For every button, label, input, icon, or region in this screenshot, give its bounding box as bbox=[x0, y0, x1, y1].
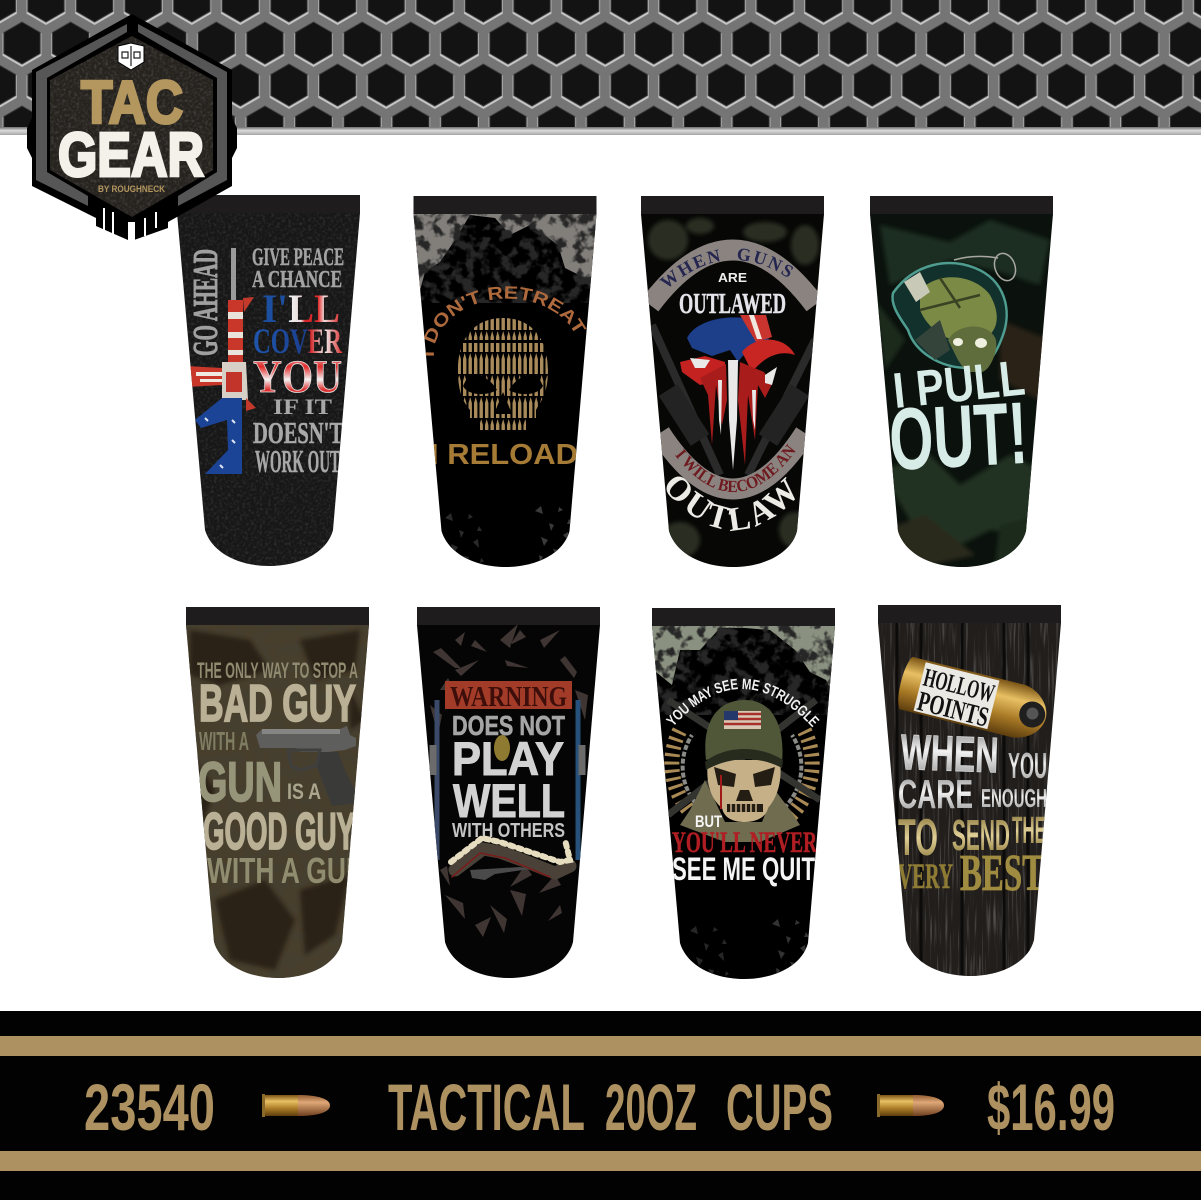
cup 2: i don't retreat bbox=[414, 214, 596, 567]
with a gun text: WITH A GUN bbox=[207, 850, 365, 891]
cup 8: hollow points bbox=[878, 605, 1062, 977]
bad guy text: BAD GUY bbox=[199, 675, 356, 733]
you text: YOU bbox=[253, 351, 342, 403]
cup 8: hollow points: YOU bbox=[1008, 745, 1047, 786]
hollow text: HOLLOW bbox=[921, 663, 998, 708]
cup 1: give peace a chance: WORK OUT bbox=[255, 443, 340, 479]
camo blobs bbox=[875, 220, 1050, 570]
play text: PLAY bbox=[452, 732, 564, 785]
arc text: I DON'T RETREAT bbox=[424, 286, 586, 356]
handgun bbox=[256, 726, 358, 806]
skull eye wings bbox=[742, 340, 795, 368]
logo panel texture bbox=[50, 36, 213, 217]
if it text: IF IT bbox=[273, 394, 332, 419]
good guy text: GOOD GUY bbox=[203, 803, 355, 861]
grenade pin bbox=[954, 252, 1016, 282]
by roughneck text: BY ROUGHNECK bbox=[98, 184, 165, 195]
bottom spatter bbox=[535, 506, 570, 561]
logo emblem bbox=[118, 43, 144, 70]
does not text: DOES NOT bbox=[452, 710, 565, 741]
cup 3: when guns are outlawed bbox=[641, 214, 824, 567]
cup 8: hollow points: SEND bbox=[952, 811, 1010, 860]
cup 4 lid bbox=[870, 196, 1053, 214]
logo bottom stripes bbox=[103, 208, 157, 240]
helmet bbox=[705, 700, 783, 762]
enough text: ENOUGH bbox=[981, 783, 1047, 813]
doesn't text: DOESN'T bbox=[253, 415, 343, 450]
olive smoke bbox=[648, 218, 819, 558]
cup 3 lid bbox=[641, 196, 824, 214]
logo outer frame bbox=[27, 14, 237, 240]
are text: ARE bbox=[718, 270, 747, 285]
well text: WELL bbox=[453, 774, 565, 827]
out text: OUT! bbox=[887, 383, 1030, 489]
with others text: WITH OTHERS bbox=[452, 820, 565, 842]
with a text: WITH A bbox=[199, 726, 249, 756]
grunge top bbox=[414, 214, 596, 290]
product title: 20OZ bbox=[605, 1070, 697, 1144]
product title: CUPS bbox=[726, 1070, 833, 1144]
crossed guns bbox=[668, 700, 820, 815]
skull eyes and nose bbox=[460, 340, 546, 414]
chains bbox=[683, 735, 801, 808]
cup 5: bad guy with a gun bbox=[186, 607, 370, 979]
flag patch bbox=[724, 711, 761, 729]
cup 6: warning bbox=[417, 607, 601, 979]
cup 4: i pull out bbox=[870, 196, 1054, 570]
i'll text: I'LL bbox=[262, 286, 340, 331]
helicopter bbox=[470, 867, 530, 880]
give peace text: GIVE PEACE bbox=[252, 244, 344, 271]
cup 7: never see me quit bbox=[652, 626, 835, 979]
i will become an text: I WILL BECOME AN bbox=[675, 444, 796, 492]
cup 6 lid bbox=[417, 607, 600, 625]
eyes and nose bbox=[714, 767, 775, 812]
see me quit text: SEE ME QUIT bbox=[672, 851, 815, 887]
cup 8: hollow points: THE bbox=[1012, 810, 1046, 852]
care text: CARE bbox=[898, 771, 973, 817]
bottom banner bbox=[0, 1011, 1201, 1200]
teeth bbox=[731, 804, 756, 812]
a chance text: A CHANCE bbox=[252, 267, 342, 293]
tan stripe bottom bbox=[0, 1151, 1201, 1171]
rifle bbox=[187, 248, 256, 474]
tan stripe top bbox=[0, 1036, 1201, 1056]
gun text: GUN bbox=[198, 750, 282, 813]
gear text: GEAR bbox=[58, 121, 204, 190]
bullet left bbox=[262, 1094, 330, 1117]
to text: TO bbox=[898, 809, 938, 867]
you'll never text: YOU'LL NEVER bbox=[672, 826, 817, 859]
outlawed text: OUTLAWED bbox=[679, 288, 786, 320]
tac text: TAC bbox=[81, 69, 183, 136]
cup 2 lid bbox=[414, 196, 596, 214]
logo badge bbox=[27, 14, 237, 240]
product title: TACTICAL bbox=[388, 1070, 585, 1144]
go ahead text: GO AHEAD bbox=[186, 249, 225, 356]
is a text: IS A bbox=[287, 779, 321, 804]
cup 8 lid bbox=[878, 605, 1061, 623]
best text: BEST bbox=[960, 845, 1044, 902]
collar bbox=[680, 780, 800, 842]
i pull text: I PULL bbox=[890, 349, 1027, 419]
lower ribbon bbox=[660, 433, 805, 489]
price: $16.99 bbox=[987, 1070, 1115, 1144]
hollow point bullet bbox=[894, 656, 1052, 747]
grunge top bbox=[652, 625, 836, 700]
outlaw text: OUTLAW bbox=[666, 476, 795, 532]
metal mesh header band bbox=[0, 0, 1201, 135]
very text: VERY bbox=[898, 856, 953, 896]
cup 7 lid bbox=[652, 608, 835, 626]
logo inner panel bbox=[50, 36, 213, 217]
bullet right bbox=[877, 1094, 944, 1117]
punisher skull flag bbox=[687, 317, 770, 362]
item number: 23540 bbox=[84, 1070, 215, 1144]
points text: POINTS bbox=[914, 686, 992, 733]
when text: WHEN bbox=[900, 724, 1000, 783]
skull bbox=[707, 760, 781, 822]
when guns text: WHEN GUNS bbox=[659, 248, 794, 286]
warning box: WARNING bbox=[450, 682, 567, 713]
but text: BUT bbox=[695, 812, 722, 831]
bullet belt bbox=[451, 838, 570, 877]
i reload text: I RELOAD bbox=[430, 439, 578, 471]
dark mottled patches bbox=[190, 630, 365, 970]
crossed rifles bbox=[652, 325, 815, 475]
right bullet arc bbox=[791, 730, 812, 815]
bullet skull bbox=[458, 318, 548, 430]
skull drips bbox=[700, 362, 772, 465]
arc text: YOU MAY SEE ME STRUGGLE bbox=[666, 678, 820, 728]
wood lines bbox=[897, 623, 1028, 975]
grenade bbox=[892, 263, 1007, 372]
grenade charm bbox=[494, 735, 510, 761]
cup 1: give peace a chance bbox=[177, 195, 360, 567]
logo gray ring bbox=[36, 24, 227, 206]
side rifles bbox=[433, 700, 582, 860]
cover text: COVER bbox=[253, 321, 343, 361]
upper ribbon bbox=[650, 250, 815, 305]
way to stop text: THE ONLY WAY TO STOP A bbox=[197, 658, 358, 683]
grenade skull bbox=[948, 326, 996, 372]
left bullet arc bbox=[672, 730, 693, 815]
diamond plate bbox=[430, 624, 588, 937]
blood streak bbox=[720, 775, 722, 809]
bottom spatter bbox=[772, 919, 811, 975]
